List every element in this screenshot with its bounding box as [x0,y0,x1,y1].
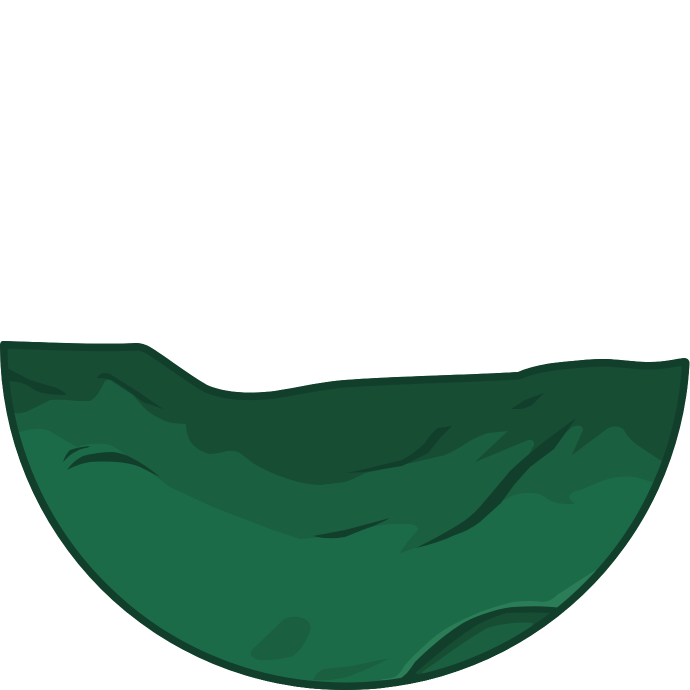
rock outline [401,606,564,684]
hill lower light band [0,429,690,690]
rock inner face [422,622,533,685]
hill middle band [0,380,690,690]
crease strokes [5,367,576,548]
hill base: dark upper slope [0,330,690,690]
blotch near bottom [313,658,390,680]
hill outline [0,341,690,690]
blotch on lower slope [251,617,310,660]
rock inner shadow [415,612,550,680]
illustration: green hill [0,341,690,690]
rock highlight [380,570,600,690]
